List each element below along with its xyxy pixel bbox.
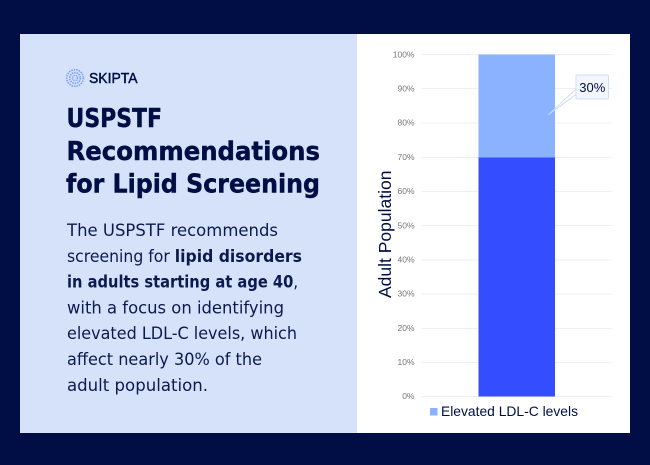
body text: screening for lipid disorders xyxy=(67,247,302,267)
body text: with a focus on identifying xyxy=(67,298,284,318)
body text: elevated LDL-C levels, which xyxy=(67,324,297,344)
gridlines xyxy=(421,54,612,396)
y-axis labels: 0% xyxy=(402,391,415,401)
icon: dotted globe xyxy=(67,70,83,86)
y-axis labels: 100% xyxy=(393,50,415,60)
callout: 30% xyxy=(548,75,608,115)
legend: Elevated LDL-C levels xyxy=(441,403,578,419)
y-axis labels: 10% xyxy=(397,357,415,367)
title: Recommendations xyxy=(66,137,320,167)
callout: 30%: 30% xyxy=(579,80,606,95)
body text: adult population. xyxy=(67,376,208,396)
body text: The USPSTF recommends xyxy=(66,221,278,241)
y-axis labels: 30% xyxy=(397,288,415,298)
panel: chart xyxy=(357,34,630,433)
y-axis labels: 40% xyxy=(397,254,415,264)
logo: Skipta xyxy=(67,70,138,87)
panel: text panel xyxy=(20,34,357,433)
y-axis labels: 90% xyxy=(397,84,415,94)
y-axis labels: 20% xyxy=(397,323,415,333)
y-axis labels: 60% xyxy=(397,186,415,196)
title: for Lipid Screening xyxy=(66,170,320,200)
stacked bar xyxy=(478,54,555,396)
body text xyxy=(66,221,302,396)
y-axis labels xyxy=(393,50,415,401)
bar segment: elevated LDL-C 30% xyxy=(478,54,555,158)
y-axis title: Adult Population xyxy=(375,171,395,298)
title: USPSTF xyxy=(66,104,162,134)
bar segment: remainder 70% xyxy=(478,158,555,396)
y-axis labels: 50% xyxy=(397,220,415,230)
y-axis labels: 70% xyxy=(397,152,415,162)
body text: in adults starting at age 40, xyxy=(67,272,298,292)
y-axis labels: 80% xyxy=(397,118,415,128)
title xyxy=(66,104,320,200)
logo: Skipta: SKIPTA xyxy=(89,71,138,87)
body text: affect nearly 30% of the xyxy=(67,350,262,370)
